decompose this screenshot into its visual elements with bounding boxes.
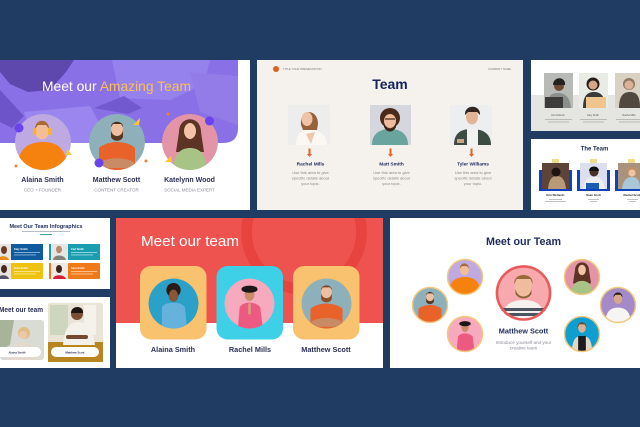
description: creative team xyxy=(510,346,537,350)
arrows xyxy=(307,148,474,157)
person mid right xyxy=(600,287,636,323)
names and roles: Matthew Scott xyxy=(93,177,141,184)
card: Matthew Scott xyxy=(293,266,360,354)
card: yellow: Gina Smith xyxy=(14,266,28,270)
photo 3 xyxy=(615,73,640,108)
center person xyxy=(496,265,552,321)
descriptions: your topic. xyxy=(301,181,320,186)
descriptions: specific details about xyxy=(454,176,492,180)
names and roles: CEO + FOUNDER xyxy=(24,188,62,192)
descriptions: specific details about xyxy=(373,176,411,180)
photo 2 xyxy=(579,73,608,108)
title: Meet our Amazing Team xyxy=(42,78,191,94)
title: Meet our team xyxy=(0,305,43,314)
captions xyxy=(552,114,636,116)
person bottom right xyxy=(564,316,600,352)
name: Matthew Scott xyxy=(301,345,351,354)
panel: amazing team xyxy=(0,60,250,210)
person: Matt Smith xyxy=(370,105,411,145)
person: Alaina Smith xyxy=(15,114,71,170)
names: Rachel Scott xyxy=(624,193,640,197)
captions: Gary Smith xyxy=(587,114,600,117)
caption lines xyxy=(545,199,638,202)
card: blue: Katy Smith xyxy=(14,247,28,251)
name: Rachel Mills xyxy=(229,345,271,354)
photo 1 xyxy=(544,73,573,108)
label: Alaina Smith xyxy=(9,350,26,354)
card: Alaina Smith xyxy=(140,266,206,354)
descriptions: your topic. xyxy=(464,181,482,186)
label: Matthew Scott xyxy=(66,350,85,354)
title: Meet our Team xyxy=(486,236,561,248)
header: TITLE YOUR PRESENTATION xyxy=(283,67,322,71)
names and roles: SOCIAL MEDIA EXPERT xyxy=(164,188,215,192)
names: Rachel Mills xyxy=(297,162,325,168)
names: Erin Richards xyxy=(546,193,565,197)
descriptions: Use this area to give xyxy=(292,170,330,175)
photo 3 xyxy=(615,159,640,191)
person bottom left xyxy=(447,316,483,352)
purple header xyxy=(0,60,238,143)
names and roles: Alaina Smith xyxy=(21,177,64,184)
names: Matt Smith xyxy=(379,162,404,168)
panel: meet our team circles xyxy=(390,218,640,368)
name: Matthew Scott xyxy=(499,326,549,336)
header: COMPANY NAME xyxy=(488,67,511,71)
person: Matthew Scott xyxy=(89,114,145,170)
title: Meet our team xyxy=(141,233,239,250)
person: Katelynn Wood xyxy=(162,114,218,170)
panel: office team xyxy=(531,60,640,131)
person mid left xyxy=(412,287,448,323)
names xyxy=(297,162,489,168)
names: Tyler Williams xyxy=(457,162,489,168)
person: Tyler Williams xyxy=(450,105,492,145)
names and roles xyxy=(21,177,215,192)
title: Team xyxy=(372,76,408,92)
panel: infographics xyxy=(0,218,110,289)
caption lines xyxy=(545,119,640,122)
names xyxy=(546,194,640,196)
title: Meet Our Team Infographics xyxy=(10,224,82,230)
title: The Team xyxy=(581,146,608,152)
names and roles: CONTENT CREATOR xyxy=(94,188,139,192)
decorative ring xyxy=(241,218,367,294)
captions: Rachel Mills xyxy=(623,114,636,117)
header xyxy=(273,66,511,72)
decorative accents xyxy=(14,112,214,168)
descriptions: specific details about xyxy=(292,176,330,180)
descriptions: Use this area to give xyxy=(373,170,411,175)
descriptions xyxy=(292,170,492,186)
names and roles: Katelynn Wood xyxy=(164,177,215,184)
card: Rachel Mills xyxy=(216,266,283,354)
name: Alaina Smith xyxy=(151,345,195,354)
panel: meet our team photos xyxy=(0,297,110,368)
person top right xyxy=(564,259,600,295)
descriptions: Use this area to give xyxy=(455,170,492,175)
person top left xyxy=(447,259,483,295)
card: teal: Carl Smith xyxy=(71,247,84,251)
captions: Erin Roberts xyxy=(551,114,565,117)
description xyxy=(496,340,552,350)
person: Rachel Mills xyxy=(288,105,330,145)
template collage xyxy=(0,60,640,368)
panel: team beige xyxy=(257,60,523,210)
panel: the team xyxy=(531,139,640,210)
subtitle xyxy=(22,231,70,232)
photo 1 xyxy=(539,159,572,191)
descriptions: your topic. xyxy=(382,181,401,186)
card: orange: Sara Smith xyxy=(71,266,85,270)
photo 2 xyxy=(577,159,610,191)
names: Sean Scott xyxy=(586,193,601,197)
description: Introduce yourself and your xyxy=(496,340,552,345)
panel: red team xyxy=(116,218,383,368)
